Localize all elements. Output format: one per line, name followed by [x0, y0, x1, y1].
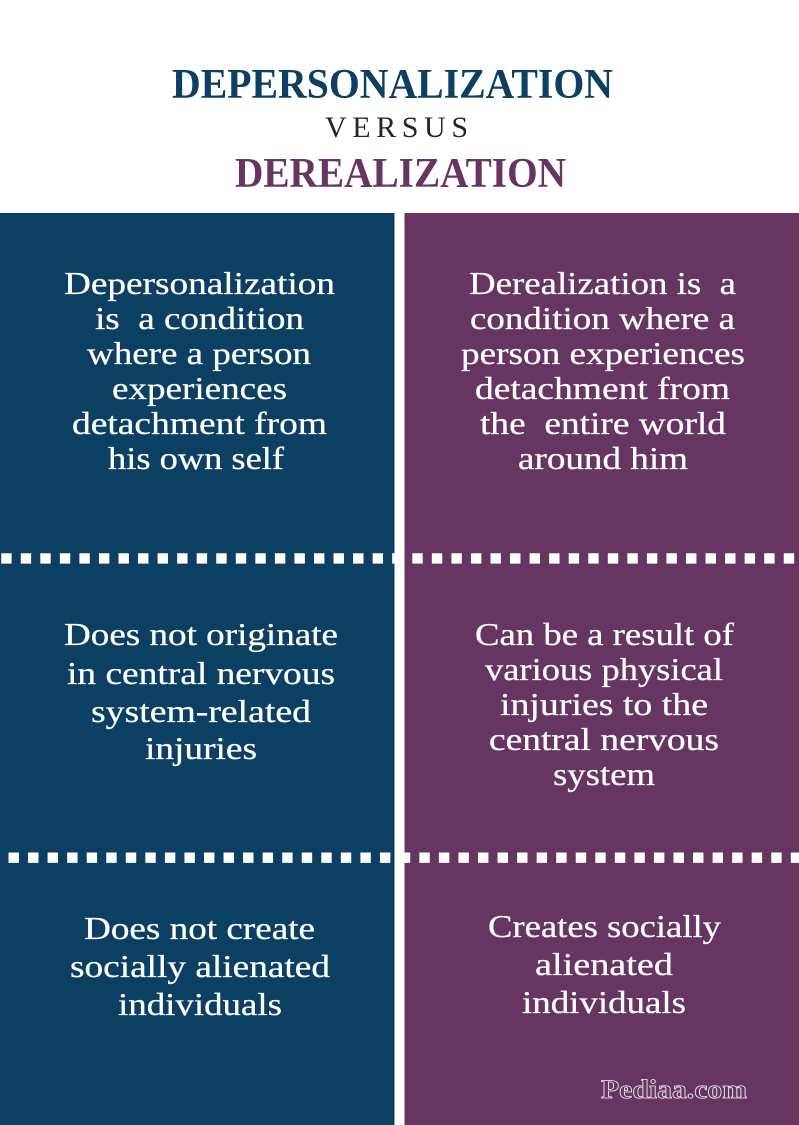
- text: derealization origin: Can be a result of: [475, 616, 734, 652]
- text: derealization social effect: alienated: [535, 946, 673, 982]
- text: depersonalization definition: Depersonalization: [64, 265, 335, 301]
- text: depersonalization origin: in central nervous: [67, 655, 335, 691]
- text: derealization origin: central nervous: [489, 721, 719, 757]
- text: depersonalization definition: where a person: [87, 335, 311, 371]
- text: depersonalization definition: detachment from: [72, 405, 327, 441]
- text: derealization origin: various physical: [485, 651, 723, 687]
- heading: depersonalization: DEPERSONALIZATION: [172, 62, 613, 108]
- text: depersonalization origin: injuries: [145, 730, 257, 766]
- text: depersonalization social effect: [70, 910, 330, 1022]
- text: depersonalization social effect: Does not create: [84, 910, 315, 946]
- text: depersonalization origin: system-related: [91, 693, 311, 729]
- text: derealization definition: around him: [518, 440, 688, 476]
- text: depersonalization origin: Does not originate: [64, 616, 338, 652]
- text: depersonalization origin: [64, 616, 338, 766]
- heading: versus: VERSUS: [325, 111, 468, 144]
- panel: depersonalization column: [0, 213, 394, 1125]
- text: derealization origin: system: [553, 756, 655, 792]
- text: depersonalization social effect: socially alienated: [70, 948, 330, 984]
- title block: [172, 62, 613, 197]
- text: derealization definition: the entire world: [480, 405, 726, 441]
- text: depersonalization definition: [64, 265, 335, 476]
- text: derealization origin: [475, 616, 734, 792]
- text: depersonalization social effect: individuals: [118, 986, 282, 1022]
- text: derealization social effect: Creates socially: [488, 908, 721, 944]
- text: derealization definition: [461, 265, 745, 476]
- text: derealization origin: injuries to the: [500, 686, 708, 722]
- text: depersonalization definition: is a condition: [95, 300, 304, 336]
- text: derealization definition: detachment from: [475, 370, 730, 406]
- text: derealization social effect: individuals: [522, 984, 686, 1020]
- text: depersonalization definition: experiences: [112, 370, 287, 406]
- text: derealization definition: Derealization is a: [469, 265, 736, 301]
- text: derealization social effect: [488, 908, 721, 1020]
- panel: derealization column: [404, 213, 799, 1125]
- text: derealization definition: person experiences: [461, 335, 745, 371]
- text: depersonalization definition: his own self: [108, 440, 284, 476]
- logo: pediaa.com: Pediaa.com: [601, 1075, 747, 1104]
- heading: derealization: DEREALIZATION: [235, 151, 566, 197]
- text: derealization definition: condition where a: [470, 300, 735, 336]
